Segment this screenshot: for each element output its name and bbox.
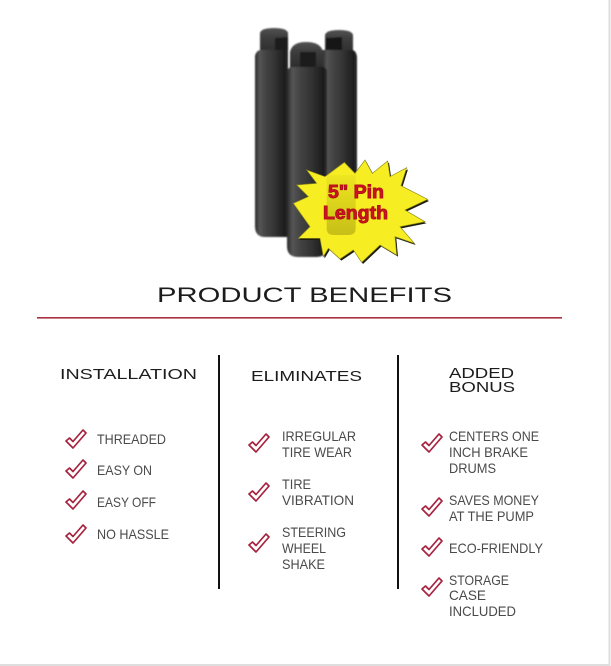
right pin bbox=[322, 30, 357, 215]
item: no hassle bbox=[66, 525, 169, 543]
item: centers one inch brake drums: DRUMS bbox=[449, 460, 496, 476]
item: saves money at the pump: AT THE PUMP bbox=[449, 508, 534, 524]
item: irregular tire wear: TIRE WEAR bbox=[282, 444, 352, 460]
item: storage case included: CASE bbox=[449, 587, 486, 603]
item: threaded bbox=[66, 430, 166, 448]
item: storage case included: INCLUDED bbox=[449, 603, 516, 619]
item: easy on bbox=[66, 460, 152, 478]
heading: added bonus: BONUS bbox=[449, 379, 515, 396]
starburst badge: 5" Pin Length bbox=[293, 160, 429, 264]
item: storage case included: STORAGE bbox=[449, 572, 509, 588]
heading: eliminates: ELIMINATES bbox=[251, 368, 362, 385]
item: easy off: EASY OFF bbox=[97, 494, 156, 510]
starburst bbox=[293, 160, 429, 264]
center pin bbox=[287, 42, 327, 257]
item: saves money at the pump: SAVES MONEY bbox=[449, 492, 540, 508]
panel: eliminates bbox=[249, 368, 362, 572]
product photo: three pins bbox=[255, 28, 357, 257]
item: eco-friendly: ECO-FRIENDLY bbox=[449, 540, 544, 556]
badge text: Length bbox=[323, 203, 388, 223]
item: easy on: EASY ON bbox=[97, 462, 152, 478]
column divider left bbox=[218, 355, 220, 589]
item: steering wheel shake bbox=[249, 524, 346, 572]
item: tire vibration bbox=[249, 476, 354, 508]
item: steering wheel shake: SHAKE bbox=[282, 556, 325, 572]
item: no hassle: NO HASSLE bbox=[97, 526, 169, 542]
left pin bbox=[255, 28, 288, 237]
panel: added bonus bbox=[422, 365, 544, 619]
item: eco-friendly bbox=[422, 538, 544, 556]
item: saves money at the pump bbox=[422, 492, 540, 524]
heading: added bonus: ADDED bbox=[449, 365, 514, 382]
item: irregular tire wear bbox=[249, 428, 356, 460]
red divider line bbox=[37, 317, 562, 319]
item: irregular tire wear: IRREGULAR bbox=[282, 428, 356, 444]
item: easy off bbox=[66, 491, 156, 510]
item: steering wheel shake: WHEEL bbox=[282, 540, 326, 556]
item: centers one inch brake drums: INCH BRAKE bbox=[449, 444, 528, 460]
column divider right bbox=[397, 355, 399, 589]
item: threaded: THREADED bbox=[97, 431, 166, 447]
panel: installation bbox=[60, 366, 197, 543]
item: storage case included bbox=[422, 572, 516, 619]
item: centers one inch brake drums: CENTERS ONE bbox=[449, 428, 539, 444]
badge text: 5" Pin bbox=[328, 182, 384, 202]
item: tire vibration: VIBRATION bbox=[282, 492, 354, 508]
item: centers one inch brake drums bbox=[422, 428, 539, 476]
heading: installation: INSTALLATION bbox=[60, 366, 197, 383]
heading: added bonus bbox=[449, 365, 515, 396]
item: tire vibration: TIRE bbox=[282, 476, 311, 492]
item: steering wheel shake: STEERING bbox=[282, 524, 346, 540]
badge text bbox=[323, 182, 388, 223]
title: PRODUCT BENEFITS bbox=[157, 284, 452, 307]
